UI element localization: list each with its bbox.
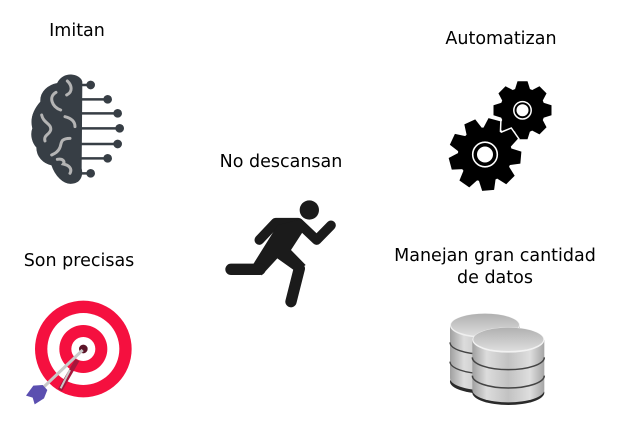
icon: large gear bbox=[448, 118, 522, 191]
icon: gears bbox=[448, 81, 552, 191]
heading: Manejan gran cantidad de datos bbox=[394, 246, 596, 288]
heading: Imitan: Imitan bbox=[49, 21, 105, 41]
icon: front cylinder bbox=[472, 327, 544, 405]
icon: target with arrow bbox=[26, 301, 132, 404]
icon: running figure bbox=[231, 200, 331, 302]
heading: Manejan gran cantidad de datos: de datos bbox=[457, 268, 533, 288]
heading: Automatizan: Automatizan bbox=[445, 29, 557, 49]
icon: brain with circuit nodes bbox=[32, 75, 124, 184]
icon: small gear bbox=[494, 81, 552, 139]
heading: No descansan: No descansan bbox=[220, 152, 342, 172]
heading: Son precisas: Son precisas bbox=[24, 251, 134, 271]
heading: Manejan gran cantidad de datos: Manejan gran cantidad bbox=[394, 246, 596, 266]
icon: back cylinder bbox=[450, 313, 520, 394]
icon: database cylinders bbox=[450, 313, 544, 405]
